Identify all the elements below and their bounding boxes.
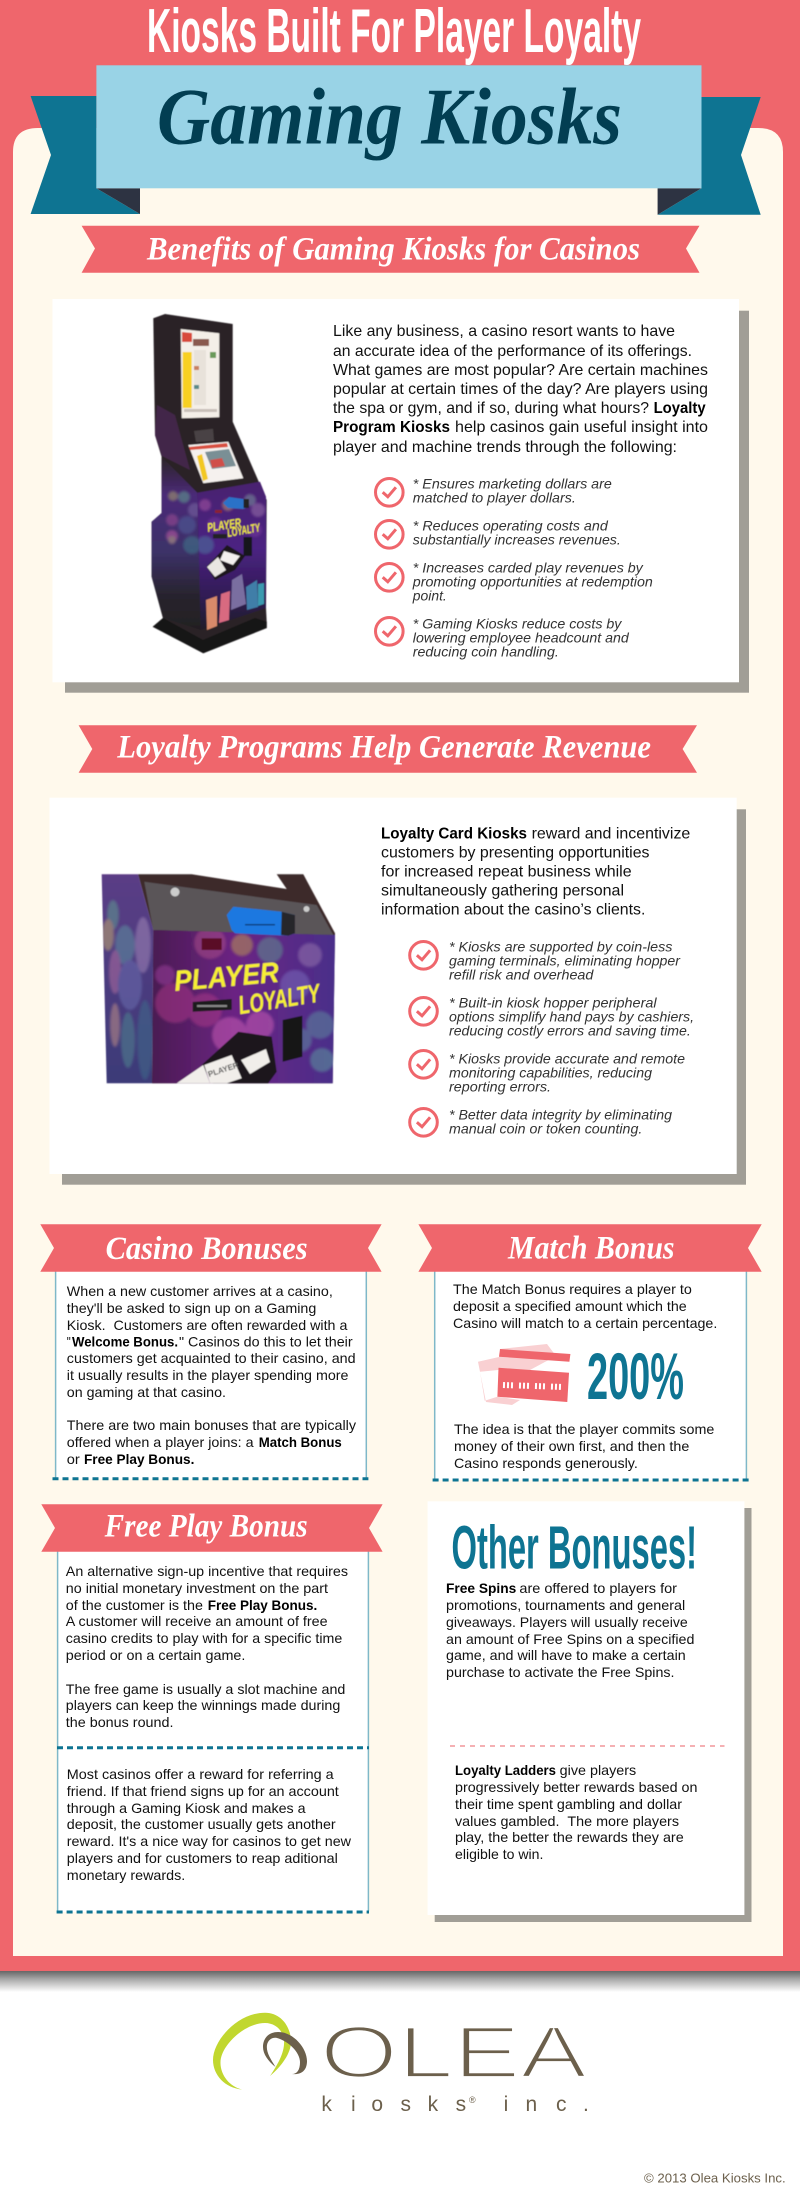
referral text: reward. It's a nice way for casinos to get new [67, 1833, 352, 1849]
logo tagline: kiosks [321, 2093, 466, 2116]
image: gaming kiosk: LOYALTY [226, 520, 262, 540]
intro paragraph: an accurate idea of the performance of its offerings. [333, 343, 692, 360]
casino bonuses text: " [67, 1333, 71, 1349]
casino bonuses text: offered when a player joins: a [67, 1434, 254, 1450]
logo tagline: inc. [504, 2093, 589, 2116]
loyalty text 2: options simplify hand pays by cashiers, [449, 1009, 694, 1025]
panel: loyalty programs [50, 798, 746, 1185]
referral text [67, 1766, 352, 1883]
banner: casino bonuses: Casino Bonuses [106, 1231, 308, 1267]
intro paragraph: Loyalty [654, 400, 706, 417]
free play text: An alternative sign-up incentive that requires [66, 1563, 348, 1579]
benefit text 3 [412, 559, 653, 603]
referral text: monetary rewards. [67, 1867, 185, 1883]
referral text: players and for customers to reap aditional [67, 1850, 338, 1866]
panel: benefits [52, 299, 749, 693]
intro paragraph: popular at certain times of the day? Are players using [333, 381, 708, 398]
loyalty text 1: refill risk and overhead [449, 967, 595, 983]
intro paragraph: Loyalty Card Kiosks [381, 825, 527, 842]
free play text [66, 1563, 348, 1730]
intro paragraph: What games are most popular? Are certain machines [333, 362, 708, 379]
match bonus text bottom: money of their own first, and then the [454, 1438, 690, 1454]
casino bonuses text: " Casinos do this to let their [179, 1333, 353, 1349]
casino bonuses text: or [67, 1451, 80, 1467]
benefit text 2 [413, 518, 621, 547]
referral text: deposit, the customer usually gets another [67, 1816, 336, 1832]
intro paragraph: simultaneously gathering personal [381, 882, 624, 899]
intro paragraph: reward and incentivize [532, 825, 690, 842]
free spins text: giveaways. Players will usually receive [446, 1614, 688, 1630]
section banner: loyalty programs: Loyalty Programs Help Generate Revenue [116, 729, 651, 765]
benefit text 3: point. [412, 587, 447, 603]
loyalty text 4 [449, 1107, 672, 1137]
loyalty ladders text [455, 1762, 697, 1862]
casino bonuses text: customers get acquainted to their casino, and [67, 1350, 356, 1366]
intro paragraph: Like any business, a casino resort wants to have [333, 323, 675, 340]
benefit text 4 [413, 615, 630, 659]
check icon 1 [410, 942, 437, 969]
loyalty text 1: gaming terminals, eliminating hopper [449, 953, 681, 969]
image: player loyalty kiosk close-up [102, 874, 335, 1083]
free play text: of the customer is the [66, 1597, 203, 1613]
section banner: benefits: Benefits of Gaming Kiosks for Casinos [146, 231, 640, 267]
banner: match bonus: Match Bonus [507, 1230, 674, 1266]
casino bonuses text: they'll be asked to sign up on a Gaming [67, 1300, 316, 1316]
intro paragraph [381, 825, 690, 918]
free play text: players can keep the winnings made during [66, 1697, 340, 1713]
loyalty ladders text: Loyalty Ladders [455, 1762, 556, 1778]
benefit text 4: * Gaming Kiosks reduce costs by [413, 615, 622, 631]
banner: casino bonuses [40, 1224, 382, 1272]
casino bonuses text: Kiosk. Customers are often rewarded with a [67, 1317, 348, 1333]
image: player loyalty kiosk close-up: LOYALTY [236, 977, 324, 1020]
free play text: Free Play Bonus. [208, 1597, 317, 1613]
logo wordmark: OLEA [320, 2013, 587, 2094]
banner: free play bonus [41, 1504, 383, 1552]
copyright: © 2013 Olea Kiosks Inc. [644, 2171, 786, 2186]
free spins text: are offered to players for [519, 1580, 677, 1596]
intro paragraph: the spa or gym, and if so, during what hours? [333, 400, 649, 417]
loyalty text 4: manual coin or token counting. [449, 1121, 642, 1137]
intro paragraph [333, 323, 708, 456]
image: gaming kiosk: PLAYER [206, 516, 242, 535]
loyalty ladders text: progressively better rewards based on [455, 1779, 697, 1795]
loyalty ladders text: their time spent gambling and dollar [455, 1796, 682, 1812]
loyalty text 3 [449, 1051, 685, 1095]
free spins text: game, and will have to make a certain [446, 1647, 686, 1663]
check icon 1 [376, 478, 403, 506]
icon: swoosh mark [213, 2013, 307, 2090]
casino bonuses text: Match Bonus [259, 1434, 342, 1450]
section banner: benefits [82, 226, 700, 273]
casino bonuses text: on gaming at that casino. [67, 1384, 226, 1400]
benefit text 1: * Ensures marketing dollars are [413, 475, 612, 491]
casino bonuses text [67, 1283, 356, 1467]
drop shadow below red background [0, 1971, 800, 1992]
loyalty ladders text: values gambled. The more players [455, 1813, 679, 1829]
free spins text: promotions, tournaments and general [446, 1597, 685, 1613]
benefit text 1 [413, 475, 612, 505]
free play text: The free game is usually a slot machine and [66, 1681, 345, 1697]
match bonus text bottom: The idea is that the player commits some [454, 1421, 715, 1437]
loyalty text 1 [449, 939, 681, 983]
match bonus text top [453, 1281, 717, 1331]
loyalty text 4: * Better data integrity by eliminating [449, 1107, 672, 1123]
panel: match bonus [418, 1224, 762, 1480]
loyalty text 1: * Kiosks are supported by coin-less [449, 939, 672, 955]
panel: other bonuses [428, 1501, 752, 1922]
benefit text 4: lowering employee headcount and [413, 629, 630, 645]
benefit text 3: * Increases carded play revenues by [413, 559, 644, 575]
loyalty text 2 [449, 995, 694, 1039]
banner: free play bonus: Free Play Bonus [104, 1509, 308, 1545]
loyalty text 3: monitoring capabilities, reducing [449, 1065, 652, 1081]
check icon 4 [376, 618, 403, 645]
loyalty text 3: reporting errors. [449, 1079, 551, 1095]
match bonus text top: The Match Bonus requires a player to [453, 1281, 692, 1297]
free play text: period or on a certain game. [66, 1647, 245, 1663]
casino bonuses text: There are two main bonuses that are typically [67, 1417, 356, 1433]
match bonus text bottom [454, 1421, 715, 1471]
intro paragraph: for increased repeat business while [381, 863, 632, 880]
benefit text 2: * Reduces operating costs and [413, 518, 609, 534]
benefit text 2: substantially increases revenues. [413, 531, 621, 547]
panel: casino bonuses [40, 1224, 382, 1479]
free play text: the bonus round. [66, 1714, 174, 1730]
stat: 200%: 200% [587, 1339, 684, 1413]
casino bonuses text: When a new customer arrives at a casino, [67, 1283, 333, 1299]
intro paragraph: Program Kiosks [333, 419, 450, 436]
main heading: Gaming Kiosks [157, 73, 622, 161]
logo: Olea Kiosks [213, 2013, 589, 2116]
free play text: casino credits to play with for a specific time [66, 1630, 343, 1646]
intro paragraph: help casinos gain useful insight into [455, 419, 708, 436]
free play text: A customer will receive an amount of free [66, 1613, 328, 1629]
free spins text [446, 1580, 694, 1680]
loyalty ladders text: eligible to win. [455, 1846, 543, 1862]
intro paragraph: information about the casino’s clients. [381, 901, 645, 918]
match bonus text bottom: Casino responds generously. [454, 1455, 638, 1471]
benefit text 1: matched to player dollars. [413, 489, 576, 505]
check icon 2 [376, 520, 403, 548]
casino bonuses text: it usually results in the player spending more [67, 1367, 349, 1383]
referral text: friend. If that friend signs up for an account [67, 1783, 339, 1799]
loyalty ladders text: give players [560, 1762, 636, 1778]
loyalty text 2: * Built-in kiosk hopper peripheral [449, 995, 658, 1011]
image: gaming kiosk [152, 314, 267, 653]
panel: free play bonus [41, 1504, 383, 1912]
banner: match bonus [418, 1224, 762, 1272]
check icon 3 [376, 564, 403, 591]
loyalty ladders text: play, the better the rewards they are [455, 1829, 684, 1845]
check icon 2 [410, 998, 437, 1025]
loyalty text 3: * Kiosks provide accurate and remote [449, 1051, 685, 1067]
free spins text: purchase to activate the Free Spins. [446, 1664, 674, 1680]
check icon 3 [410, 1050, 437, 1078]
free spins text: an amount of Free Spins on a specified [446, 1631, 694, 1647]
match bonus text top: deposit a specified amount which the [453, 1298, 687, 1314]
intro paragraph: customers by presenting opportunities [381, 844, 650, 861]
logo tagline: ® [469, 2095, 476, 2105]
match bonus text top: Casino will match to a certain percentage. [453, 1315, 717, 1331]
intro paragraph: player and machine trends through the following: [333, 439, 677, 456]
referral text: through a Gaming Kiosk and makes a [67, 1800, 306, 1816]
benefit text 3: promoting opportunities at redemption [412, 573, 653, 589]
casino bonuses text: Free Play Bonus. [84, 1451, 194, 1467]
free play text: no initial monetary investment on the part [66, 1580, 328, 1596]
image: player loyalty kiosk close-up: PLAYER [173, 957, 280, 998]
header ribbon [31, 65, 761, 215]
benefit text 4: reducing coin handling. [413, 643, 559, 659]
free spins text: Free Spins [446, 1580, 516, 1596]
casino bonuses text: Welcome Bonus. [72, 1333, 178, 1349]
icon: credit cards [478, 1344, 570, 1405]
image: player loyalty kiosk close-up: PLAYER [207, 1060, 240, 1079]
referral text: Most casinos offer a reward for referring a [67, 1766, 334, 1782]
check icon 4 [410, 1108, 437, 1136]
loyalty text 2: reducing costly errors and saving time. [449, 1023, 691, 1039]
